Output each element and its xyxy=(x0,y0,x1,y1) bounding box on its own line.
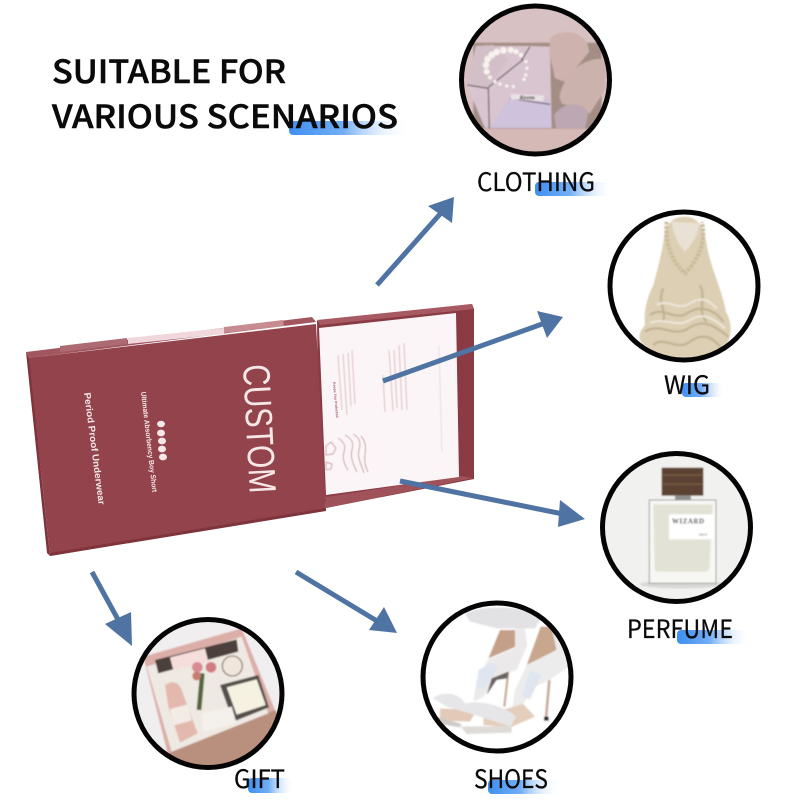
gift label: GIFT xyxy=(234,760,285,796)
subtitle: Ultimate Absorbency Boy Short xyxy=(139,391,159,493)
perfume label bar xyxy=(677,630,750,644)
tray inner paper card xyxy=(319,313,459,495)
sleeve shaded left edge xyxy=(26,352,50,556)
wig label: WIG xyxy=(664,366,710,402)
sleeve bottom edge xyxy=(50,508,326,556)
clothing label bar xyxy=(535,182,613,196)
arrow to clothing xyxy=(377,197,454,285)
perfume ring xyxy=(602,454,750,602)
clothing photo: Reem xyxy=(518,94,535,101)
paper layered illustration xyxy=(326,434,368,473)
shoes photo xyxy=(433,607,568,734)
arrow to perfume xyxy=(400,481,585,527)
arrow to gift xyxy=(92,572,132,646)
clothing label: CLOTHING xyxy=(477,163,595,199)
gift circle xyxy=(132,617,288,773)
shoes label: SHOES xyxy=(474,760,548,796)
arrow to shoes xyxy=(296,572,397,633)
outer sleeve face xyxy=(28,324,326,556)
CUSTOM wordmark: CUSTOM xyxy=(234,363,283,494)
clothing ring xyxy=(462,6,610,154)
sleeve tab labels xyxy=(60,320,284,352)
perfume photo: WIZARD xyxy=(672,518,704,526)
gift ring xyxy=(134,620,282,768)
wig photo xyxy=(638,216,732,358)
wig ring xyxy=(610,212,758,360)
title xyxy=(51,47,410,138)
outer sleeve top flap xyxy=(26,317,316,358)
perfume circle xyxy=(597,448,757,608)
perfume label: PERFUME xyxy=(627,610,733,646)
title line 1: SUITABLE FOR xyxy=(52,47,286,93)
paper heading left: Keeps You Protected xyxy=(332,382,339,418)
clothing circle xyxy=(457,0,617,160)
perfume photo: M|LO xyxy=(699,533,708,537)
wig circle xyxy=(607,208,763,365)
arrow to wig xyxy=(383,311,563,381)
shoes ring xyxy=(423,603,571,751)
drops icon xyxy=(157,421,167,460)
title line 2: VARIOUS SCENARIOS xyxy=(51,92,398,138)
wig label bar xyxy=(682,383,725,397)
inner tray xyxy=(317,304,474,508)
product name: Period Proof Underwear xyxy=(82,392,108,506)
product box xyxy=(26,304,474,556)
gift photo xyxy=(136,622,280,765)
perfume photo xyxy=(605,456,748,599)
clothing photo xyxy=(464,8,607,152)
paper copy lines xyxy=(338,343,442,452)
shoes label bar xyxy=(488,780,560,794)
gift label bar xyxy=(248,778,294,793)
title highlight bar xyxy=(289,121,410,135)
shoes circle xyxy=(420,600,577,757)
